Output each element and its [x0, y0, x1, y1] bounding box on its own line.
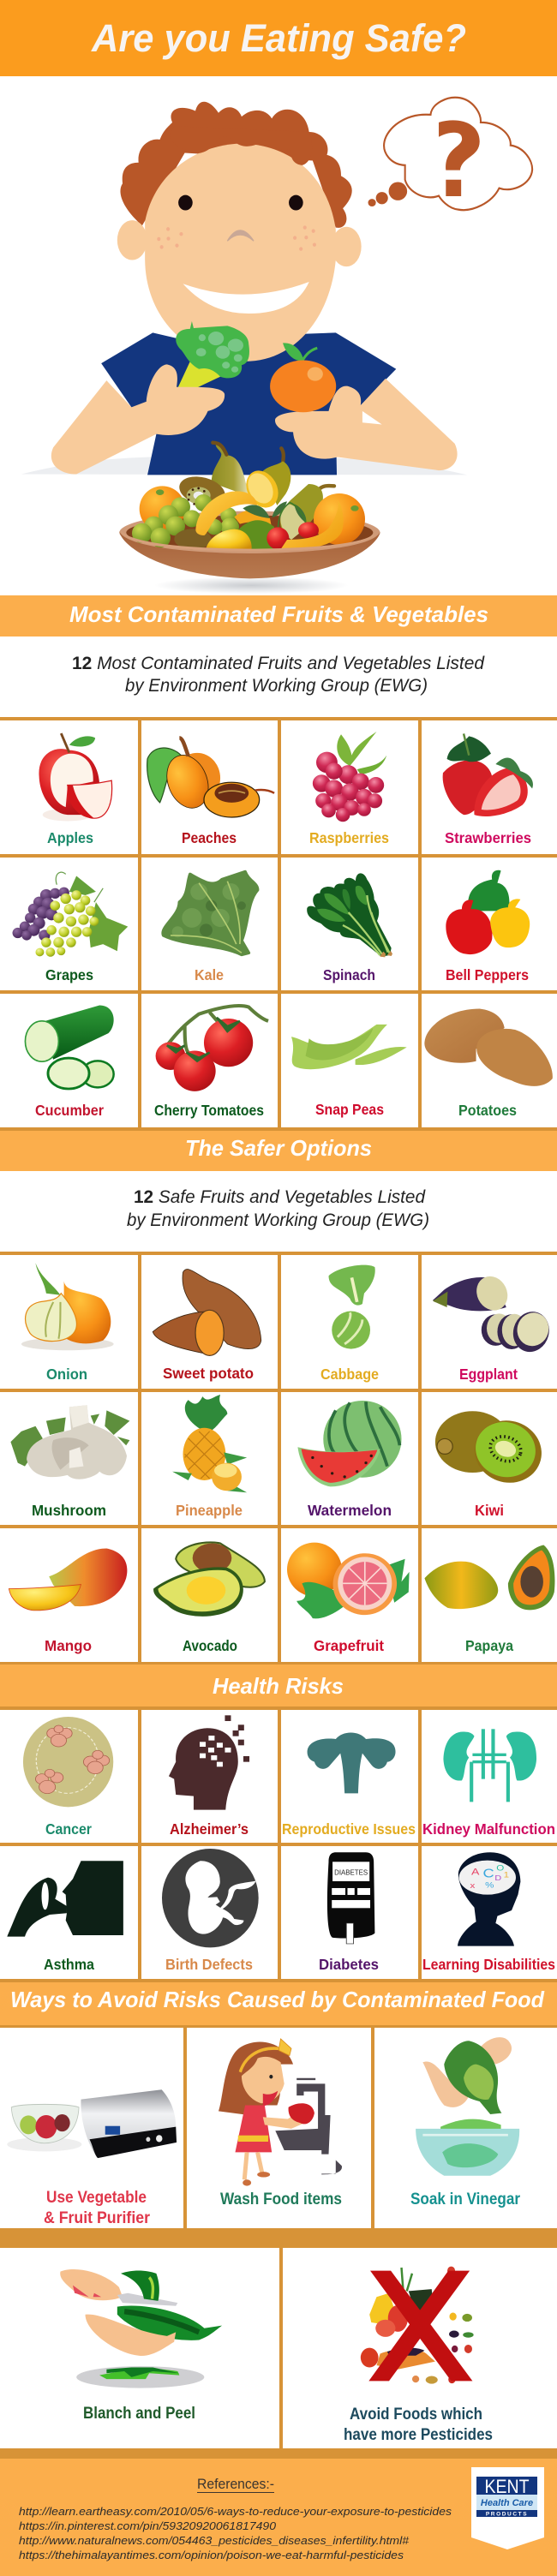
- section heading band: [0, 595, 557, 637]
- icon: watermelon: [297, 1401, 401, 1486]
- produce labels: Strawberries: [445, 829, 531, 846]
- grid lines: [0, 1252, 557, 1662]
- lemon slice: [240, 465, 284, 513]
- grid lines: [0, 717, 557, 1127]
- icon: orange held in hand: [270, 343, 336, 412]
- grid lines: [0, 1706, 557, 1982]
- logo: KENT Health Care Products: KENT: [485, 2476, 530, 2497]
- health labels: Reproductive Issues: [282, 1820, 416, 1838]
- produce labels: Sweet potato: [163, 1365, 254, 1382]
- reference links: https://thehimalayantimes.com/opinion/poison-we-eat-harmful-pesticides: [19, 2549, 404, 2561]
- health labels: Kidney Malfunction: [422, 1820, 555, 1838]
- icon: learning disabilities head: A: [471, 1866, 480, 1877]
- produce labels: Eggplant: [459, 1366, 518, 1383]
- produce labels: Snap Peas: [315, 1101, 384, 1118]
- method labels: have more Pesticides: [344, 2426, 493, 2444]
- method labels: Wash Food items: [220, 2190, 342, 2208]
- produce labels: Potatoes: [458, 1102, 517, 1119]
- icon: strawberries: [443, 733, 533, 816]
- icon: grapefruit: [287, 1543, 410, 1622]
- method icons: [7, 2037, 519, 2388]
- big banana: [195, 491, 257, 535]
- boy: [101, 102, 396, 475]
- title banner: Are you Eating Safe?: [91, 16, 466, 60]
- produce labels: Cabbage: [320, 1366, 379, 1383]
- icon: broccoli: [176, 321, 249, 390]
- icon: spinach: [307, 873, 392, 957]
- produce icons: [9, 1263, 554, 1622]
- produce labels: Mushroom: [32, 1502, 106, 1519]
- produce labels: Bell Peppers: [446, 966, 529, 983]
- health labels: Asthma: [44, 1956, 94, 1973]
- health labels: Alzheimer’s: [170, 1820, 249, 1838]
- produce labels: Kiwi: [475, 1502, 504, 1519]
- produce icons: [13, 732, 553, 1091]
- method labels: Blanch and Peel: [83, 2405, 195, 2423]
- method labels: Use Vegetable: [46, 2189, 147, 2207]
- icon: kiwi: [435, 1411, 550, 1492]
- icon: cucumber: [25, 1005, 114, 1089]
- icon: learning disabilities head: O: [496, 1863, 504, 1873]
- method labels: Soak in Vinegar: [410, 2190, 521, 2208]
- produce labels: Kale: [195, 966, 224, 983]
- icon: snap peas: [291, 1025, 407, 1069]
- icon: apple: [39, 733, 112, 821]
- produce labels: Avocado: [183, 1637, 237, 1654]
- icon: glucose meter: DIABETES: [334, 1868, 368, 1876]
- reference links: http://learn.eartheasy.com/2010/05/6-ways-to-reduce-your-exposure-to-pesticides: [19, 2505, 452, 2518]
- health labels: Birth Defects: [165, 1956, 253, 1973]
- subtitle: 12 Most Contaminated Fruits and Vegetables Listed: [72, 654, 485, 673]
- icon: mango: [9, 1549, 127, 1611]
- icon: cancer cells: [23, 1717, 113, 1807]
- panel: ways to avoid risks: [0, 1982, 557, 2459]
- apple: [238, 520, 277, 551]
- produce labels: Raspberries: [309, 829, 389, 846]
- produce labels: [32, 1365, 518, 1654]
- icon: onion: [21, 1263, 114, 1350]
- icon: blanch and peel: [60, 2269, 222, 2388]
- icon: avocado: [153, 1542, 265, 1617]
- icon: crossed out pesticide foods: [361, 2267, 474, 2384]
- panel: the safer options: [0, 1127, 557, 1662]
- produce labels: Spinach: [323, 966, 375, 983]
- leaves: [243, 505, 270, 518]
- banana front: [281, 499, 344, 550]
- produce labels: Cherry Tomatoes: [154, 1102, 264, 1119]
- produce labels: Cucumber: [35, 1102, 104, 1119]
- health labels: Cancer: [45, 1820, 92, 1838]
- icon: raspberries: [313, 732, 386, 822]
- hero illustration: boy holding vegetables: [21, 98, 532, 475]
- subtitle: by Environment Working Group (EWG): [125, 676, 428, 696]
- produce labels: Watermelon: [308, 1502, 392, 1519]
- reference links: http://www.naturalnews.com/054463_pesticides_diseases_infertility.html#: [19, 2534, 410, 2547]
- icon: grapes: [13, 872, 128, 957]
- logo: KENT Health Care Products: Health Care: [481, 2498, 533, 2508]
- icon: kale: [163, 872, 258, 954]
- icon: learning disabilities head: 1: [504, 1871, 509, 1880]
- produce labels: Papaya: [465, 1637, 513, 1654]
- icon: cabbage: [329, 1265, 375, 1349]
- produce labels: Onion: [46, 1366, 87, 1383]
- section heading band: [0, 1662, 557, 1706]
- produce labels: Grapefruit: [314, 1637, 384, 1654]
- icon: learning disabilities head: C: [482, 1866, 494, 1880]
- subtitle: [72, 654, 485, 696]
- bowl body: [119, 531, 380, 578]
- section heading band: Health Risks: [213, 1673, 344, 1699]
- icon: learning disabilities head: %: [485, 1880, 494, 1890]
- health labels: [44, 1820, 555, 1973]
- icon: uterus: [308, 1732, 396, 1793]
- subtitle: [127, 1187, 429, 1230]
- icon: asthma inhaler: [7, 1861, 123, 1937]
- produce labels: Mango: [45, 1637, 92, 1654]
- produce labels: Grapes: [45, 966, 93, 983]
- produce labels: [35, 829, 531, 1119]
- icon: eggplant: [433, 1271, 554, 1356]
- reference links: [19, 2505, 452, 2561]
- logo: KENT Health Care Products: PRODUCTS: [486, 2512, 528, 2517]
- icon: cherry tomatoes: [156, 1006, 268, 1091]
- icon: mushroom: [10, 1405, 129, 1479]
- section heading band: [0, 1127, 557, 1171]
- arms and hands: [51, 364, 458, 475]
- pears: [212, 444, 249, 494]
- icon: peach: [147, 738, 274, 817]
- section heading band: Most Contaminated Fruits & Vegetables: [69, 601, 488, 627]
- icon: foetus birth defects: [162, 1849, 259, 1947]
- panel: health risks: [0, 1662, 557, 1982]
- cherries: [278, 503, 306, 529]
- subtitle: 12 Safe Fruits and Vegetables Listed: [134, 1187, 426, 1207]
- icon: kidneys: [443, 1729, 536, 1802]
- section heading band: Ways to Avoid Risks Caused by Contaminated Food: [10, 1987, 545, 2012]
- icon: bell peppers: [446, 870, 530, 954]
- logo: KENT Health Care Products: [471, 2467, 544, 2549]
- grape cluster: [132, 494, 239, 547]
- icon: learning disabilities head: D: [494, 1874, 501, 1883]
- icon: soak in vinegar: [416, 2037, 519, 2176]
- references heading: References:-: [197, 2476, 274, 2492]
- health labels: Diabetes: [319, 1956, 379, 1973]
- icon: papaya: [424, 1545, 554, 1610]
- icon: learning disabilities head: [458, 1852, 520, 1946]
- subtitle: by Environment Working Group (EWG): [127, 1210, 429, 1230]
- icon: vegetable and fruit purifier: [7, 2089, 177, 2158]
- panel: most contaminated fruits and vegetables: [0, 595, 557, 1127]
- icon: learning disabilities head: x: [470, 1881, 476, 1891]
- reference links: https://in.pinterest.com/pin/59320920061817490: [19, 2519, 277, 2532]
- produce labels: Peaches: [182, 829, 237, 846]
- kiwi: [176, 472, 229, 511]
- method labels: & Fruit Purifier: [44, 2209, 151, 2227]
- title banner: [0, 0, 557, 76]
- method labels: [44, 2189, 521, 2444]
- thought cloud with question mark: [368, 98, 532, 210]
- icon: glucose meter: [327, 1852, 374, 1944]
- icon: pineapple: [172, 1395, 247, 1492]
- health icons: [7, 1715, 536, 1946]
- lemon: [206, 529, 252, 551]
- fruit bowl: [119, 443, 380, 594]
- kiwi lower: [174, 529, 212, 549]
- icon: potatoes: [424, 1009, 553, 1086]
- panel: references footer: [0, 2459, 557, 2576]
- section heading band: [0, 1982, 557, 2028]
- icon: sweet potato: [153, 1270, 261, 1355]
- produce labels: Pineapple: [176, 1502, 243, 1519]
- oranges: [140, 486, 185, 532]
- icon: alzheimer's head: [169, 1715, 249, 1810]
- section heading band: The Safer Options: [185, 1135, 372, 1161]
- produce labels: Apples: [47, 829, 93, 846]
- method labels: Avoid Foods which: [350, 2406, 482, 2424]
- icon: girl washing food: [219, 2039, 342, 2186]
- panel dividers: [0, 2028, 557, 2459]
- table shadow: [21, 457, 467, 475]
